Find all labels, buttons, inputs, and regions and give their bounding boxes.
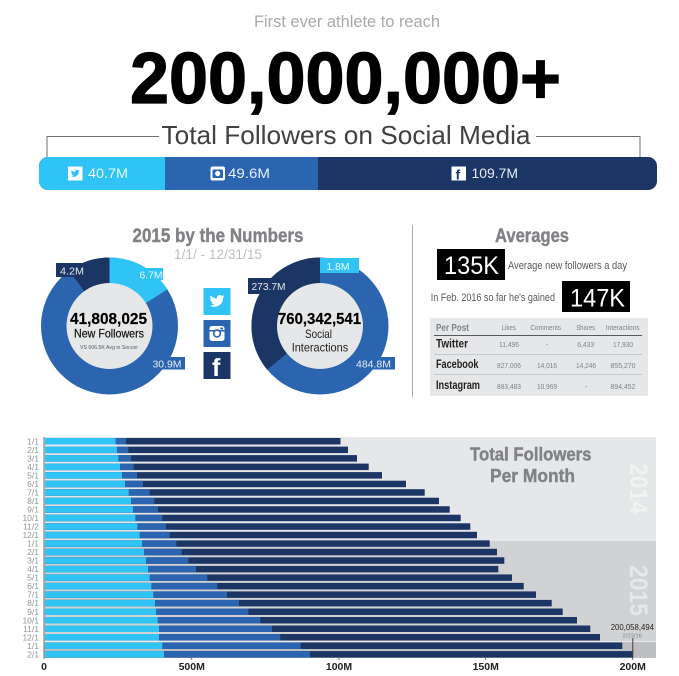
x axis labels: 100M xyxy=(326,661,352,673)
heading: averages: Averages xyxy=(495,226,569,247)
y axis labels: 11/2 xyxy=(23,522,39,532)
y axis labels: 6/1 xyxy=(27,479,39,489)
stat: 135K: 135K xyxy=(444,252,499,280)
x axis labels: 0 xyxy=(41,661,47,673)
y axis labels: 6/1 xyxy=(27,581,39,591)
stat: 147K: 147K xyxy=(570,284,625,312)
icon: instagram small xyxy=(210,166,225,180)
icon: facebook small: f xyxy=(456,166,460,182)
table header: Shares xyxy=(576,325,596,332)
year label: 2014: 2014 xyxy=(624,463,652,514)
bars: instagram series xyxy=(45,438,310,658)
donut caption: New Followers xyxy=(74,327,144,341)
stat caption: Average new followers a day xyxy=(508,260,627,272)
label: 273.7M: 273.7M xyxy=(252,281,286,293)
y axis labels: 3/1 xyxy=(27,453,39,463)
table header: Per Post xyxy=(436,323,470,334)
donut note: VS 606.5K Avg in Soccer xyxy=(80,345,138,351)
x axis labels: 200M xyxy=(620,661,646,673)
table row: instagram: 894,452 xyxy=(610,384,636,391)
subtitle: First ever athlete to reach xyxy=(254,12,440,31)
value: instagram: 49.6M xyxy=(228,165,270,181)
x axis labels: 150M xyxy=(473,661,499,673)
icon: facebook small xyxy=(452,166,466,182)
donut: social interactions xyxy=(248,257,395,394)
table header: Interactions xyxy=(606,325,640,332)
label: 4.2M: 4.2M xyxy=(60,266,84,278)
label: 30.9M: 30.9M xyxy=(152,358,182,370)
y axis labels: 12/1 xyxy=(22,530,39,540)
value: facebook: 109.7M xyxy=(472,165,518,181)
divider xyxy=(412,225,413,397)
table row: facebook: Facebook xyxy=(436,359,479,371)
stacked bar: total followers xyxy=(39,157,657,190)
label: 6.7M: 6.7M xyxy=(140,270,162,282)
icon: twitter xyxy=(204,288,230,315)
y axis labels: 3/1 xyxy=(27,556,39,566)
y axis labels: 7/1 xyxy=(27,590,39,600)
label: 273.7M xyxy=(248,278,288,294)
y axis labels: 2/1 xyxy=(27,547,39,557)
y axis labels: 4/1 xyxy=(27,462,39,472)
y axis labels: 9/1 xyxy=(27,504,39,514)
date range: 1/1/ - 12/31/15 xyxy=(174,246,262,262)
x axis labels: 500M xyxy=(179,661,205,673)
bracket xyxy=(47,136,640,157)
y axis labels xyxy=(22,436,39,659)
table row: facebook: 855,270 xyxy=(610,363,636,370)
y axis labels: 1/1 xyxy=(27,641,39,651)
donut caption: Social xyxy=(305,327,332,341)
table row: instagram: 10,969 xyxy=(537,384,557,391)
table row: twitter: 6,433 xyxy=(577,342,594,349)
y axis labels: 1/1 xyxy=(27,436,39,446)
table row: facebook: 827,006 xyxy=(497,363,521,370)
icon: facebook: f xyxy=(212,354,221,382)
chart heading: Total Followers xyxy=(470,444,592,464)
table row: instagram: - xyxy=(585,384,588,391)
table row: twitter: 17,930 xyxy=(613,342,633,349)
x axis ticks xyxy=(192,658,633,660)
table row: twitter xyxy=(436,339,633,351)
label: 4.2M xyxy=(56,263,85,278)
label: 1.8M: 1.8M xyxy=(326,261,350,273)
y axis labels: 7/1 xyxy=(27,488,39,498)
y axis labels: 9/1 xyxy=(27,607,39,617)
table header: Comments xyxy=(530,325,562,332)
heading: total followers: Total Followers on Social Media xyxy=(162,120,531,150)
y axis labels: 10/1 xyxy=(22,615,39,625)
chart heading xyxy=(470,444,592,486)
y axis labels: 11/1 xyxy=(23,624,39,634)
y axis labels: 8/1 xyxy=(27,496,39,506)
icon: instagram xyxy=(204,320,230,347)
table row: facebook: 14,016 xyxy=(537,363,557,370)
table row: facebook xyxy=(436,359,636,371)
y axis labels: 2/1 xyxy=(27,649,39,659)
table row: instagram: Instagram xyxy=(436,380,480,392)
table row: twitter: - xyxy=(546,342,549,349)
label: 1.8M xyxy=(320,258,359,273)
icon: facebook xyxy=(204,352,230,382)
y axis labels: 2/1 xyxy=(27,445,39,455)
y axis labels: 12/1 xyxy=(22,632,39,642)
y axis labels: 5/1 xyxy=(27,573,39,583)
icon: twitter small xyxy=(68,166,82,180)
y axis labels: 8/1 xyxy=(27,598,39,608)
year label: 2015: 2015 xyxy=(624,565,652,616)
chart: total followers per month xyxy=(22,436,656,673)
panel: 2014 xyxy=(44,437,656,540)
bars: facebook series xyxy=(45,438,633,658)
panel: 2016 xyxy=(44,642,656,658)
table row: twitter: 11,496 xyxy=(499,342,519,349)
donut: new followers xyxy=(41,258,185,394)
heading: 2015 by the numbers: 2015 by the Numbers xyxy=(132,226,304,247)
table row: instagram: 883,483 xyxy=(497,384,521,391)
chart heading: Per Month xyxy=(490,466,575,486)
stat caption 2: In Feb. 2016 so far he's gained xyxy=(431,292,555,304)
table header xyxy=(436,323,640,334)
table row: twitter: Twitter xyxy=(436,339,468,351)
y axis labels: 4/1 xyxy=(27,564,39,574)
y axis labels: 10/1 xyxy=(22,513,39,523)
table row: instagram xyxy=(436,380,636,392)
y axis labels: 5/1 xyxy=(27,470,39,480)
callout: 200,058,494: 2/23/16 xyxy=(623,633,642,639)
donut value: 760,342,541 xyxy=(278,311,361,328)
donut caption line 2: Interactions xyxy=(292,341,348,355)
callout: 200,058,494: 200,058,494 xyxy=(611,623,655,632)
callout: 200,058,494 xyxy=(611,623,655,658)
y axis labels: 1/1 xyxy=(27,539,39,549)
panel: 2015 xyxy=(44,540,656,642)
table: per post xyxy=(430,318,648,396)
bars: twitter series xyxy=(45,438,164,658)
table row: facebook: 14,246 xyxy=(576,363,596,370)
label: 484.8M: 484.8M xyxy=(356,358,391,370)
x axis labels xyxy=(41,661,646,673)
donut value: 41,808,025 xyxy=(70,311,147,328)
title: 200,000,000+ xyxy=(130,39,561,119)
table header: Likes xyxy=(502,325,516,332)
y axis xyxy=(44,437,45,659)
value: twitter: 40.7M xyxy=(88,165,128,181)
